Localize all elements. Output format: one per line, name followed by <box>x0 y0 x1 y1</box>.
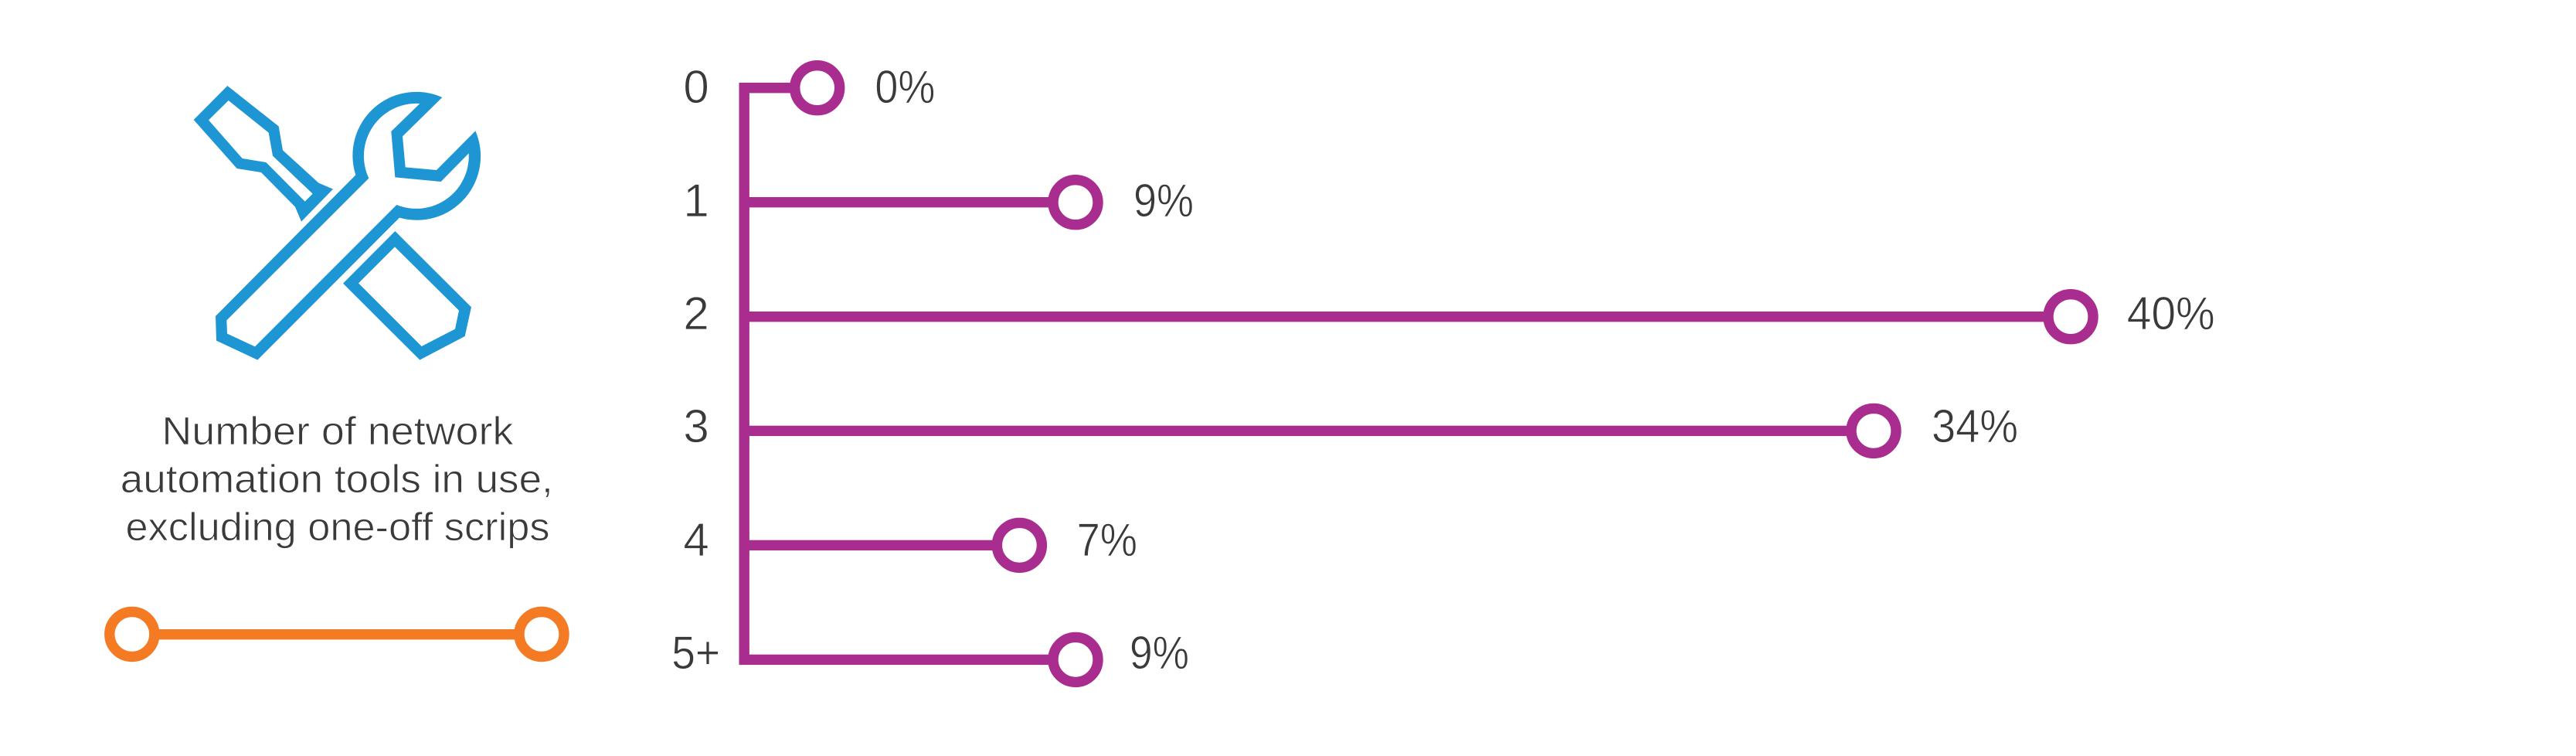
icon part: screwdriver handle <box>343 231 471 360</box>
row: 4 tools, 7%: 4 <box>683 514 709 566</box>
row: 0 tools, 0%: 0 <box>683 61 709 113</box>
chart: lollipop bars of tool counts <box>671 61 2215 682</box>
icon: crossed screwdriver and wrench <box>194 86 481 360</box>
row: 5+ tools, 9% <box>671 627 1189 682</box>
panel: left legend with icon and description <box>110 86 564 656</box>
row: 2 tools, 40% <box>683 288 2215 339</box>
row: 4 tools, 7% <box>683 514 1137 567</box>
row: 5+ tools, 9%: 5+ <box>671 627 720 679</box>
row: 0 tools, 0% <box>683 61 935 113</box>
row: 3 tools, 34% <box>683 400 2018 453</box>
icon part: wrench <box>216 92 481 360</box>
legend: orange line with two end circles <box>110 612 564 657</box>
row: 4 tools, 7%: 7% <box>1077 514 1137 566</box>
description text <box>121 409 553 549</box>
chart axis: vertical line <box>739 83 749 665</box>
row: 3 tools, 34%: 3 <box>683 400 709 452</box>
row: 3 tools, 34%: 34% <box>1932 400 2018 452</box>
description text: automation tools in use, <box>121 457 553 501</box>
row: 2 tools, 40%: 40% <box>2127 288 2215 339</box>
row: 1 tool, 9%: 1 <box>683 175 709 226</box>
row: 5+ tools, 9%: 9% <box>1130 627 1189 679</box>
row: 1 tool, 9% <box>683 175 1194 226</box>
row: 1 tool, 9%: 9% <box>1133 175 1194 226</box>
description text: Number of network <box>161 409 514 453</box>
row: 0 tools, 0%: 0% <box>875 61 935 113</box>
row: 2 tools, 40%: 2 <box>683 288 709 339</box>
description text: excluding one-off scrips <box>125 505 550 549</box>
icon part: screwdriver shaft <box>194 86 333 222</box>
